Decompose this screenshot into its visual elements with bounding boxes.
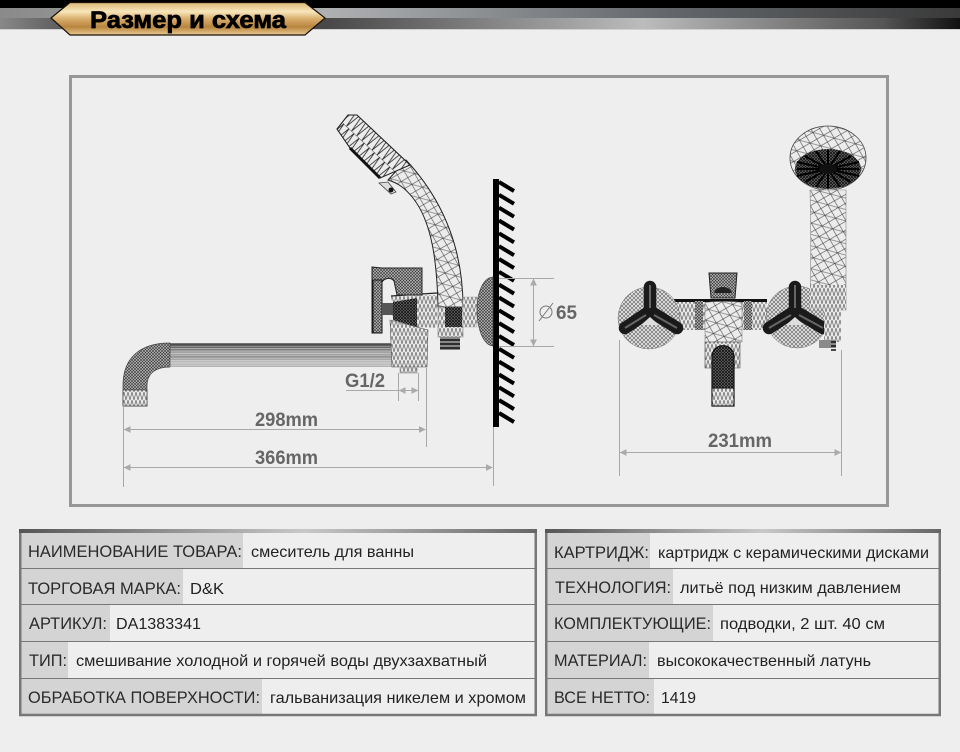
- row: product name: смеситель для ванны: [251, 544, 414, 561]
- label: diameter 65: [539, 303, 577, 324]
- row: brand: ТОРГОВАЯ МАРКА:: [28, 580, 181, 598]
- row: type: смешивание холодной и горячей воды двухзахватный: [76, 653, 487, 670]
- row: product name: НАИМЕНОВАНИЕ ТОВАРА:: [28, 543, 242, 561]
- left disc and tri-handle: [618, 285, 680, 349]
- title badge: [51, 2, 325, 35]
- row: article: DA1383341: [116, 616, 201, 633]
- right disc and tri-handle: [766, 285, 828, 348]
- horizontal body bar: [663, 299, 767, 330]
- row: surface finish: [28, 689, 526, 707]
- row: net weight: [554, 689, 696, 707]
- row: technology: [555, 579, 901, 597]
- shower head front: [790, 126, 866, 190]
- lever handle: [372, 267, 422, 333]
- row: article: АРТИКУЛ:: [29, 615, 107, 633]
- spout front: [712, 346, 734, 406]
- label: 298mm: 298mm: [255, 410, 318, 431]
- row: surface finish: ОБРАБОТКА ПОВЕРХНОСТИ:: [28, 689, 260, 707]
- header band: [0, 0, 960, 30]
- spout pipe: [123, 343, 394, 406]
- valve body: [390, 293, 437, 373]
- label: G1/2: G1/2: [345, 371, 385, 392]
- shower holder and thread: [438, 307, 463, 350]
- row: technology: ТЕХНОЛОГИЯ:: [555, 579, 671, 597]
- wall flange: [463, 277, 493, 346]
- label: 366mm: 366mm: [255, 448, 318, 469]
- side view faucet drawing: [123, 115, 514, 427]
- panel: diagram frame: [70, 76, 888, 506]
- central valve: [705, 302, 742, 368]
- row: cartridge: [554, 544, 929, 562]
- front view faucet drawing: [618, 126, 866, 406]
- row: product name: [28, 543, 414, 561]
- row: accessories: КОМПЛЕКТУЮЩИЕ:: [554, 615, 711, 633]
- row: type: ТИП:: [29, 652, 67, 670]
- shower head: [337, 115, 410, 194]
- lever top front: [709, 273, 737, 298]
- title: Размер и схема: [90, 7, 287, 34]
- row: material: МАТЕРИАЛ:: [554, 652, 647, 670]
- row: article: [29, 615, 201, 633]
- row: surface finish: гальванизация никелем и хромом: [270, 690, 526, 707]
- row: accessories: подводки, 2 шт. 40 см: [720, 616, 885, 633]
- row: material: высококачественный латунь: [657, 653, 871, 670]
- row: net weight: 1419: [661, 690, 696, 707]
- row: cartridge: КАРТРИДЖ:: [554, 544, 649, 562]
- row: cartridge: картридж с керамическими дисками: [658, 545, 929, 562]
- row: accessories: [554, 615, 885, 633]
- panel: right specification table: [545, 529, 941, 715]
- dimension lines front view: [620, 340, 842, 476]
- label: diameter 65: 65: [556, 303, 577, 324]
- row: net weight: ВСЕ НЕТТО:: [554, 689, 650, 707]
- row: brand: D&K: [190, 581, 224, 598]
- dimension lines side view: [124, 278, 554, 487]
- shower hose handle: [388, 160, 463, 307]
- row: technology: литьё под низким давлением: [680, 580, 901, 597]
- row: material: [554, 652, 871, 670]
- shower handle front: [810, 190, 846, 310]
- panel: left specification table: [19, 529, 537, 715]
- wall with hatching: [493, 179, 514, 427]
- shower connector: [819, 310, 841, 350]
- label: 231mm: 231mm: [708, 431, 772, 452]
